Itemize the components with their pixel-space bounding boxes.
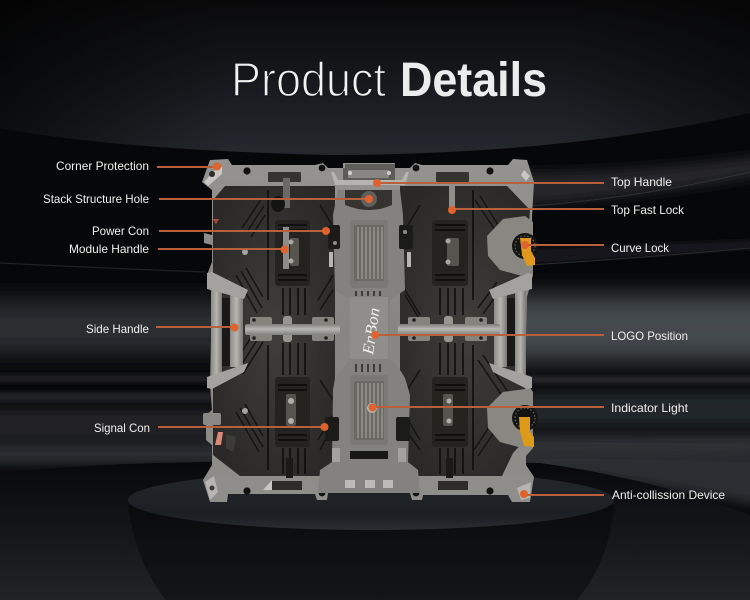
left labels: Signal Con (94, 421, 150, 435)
LED cabinet product photo (202, 159, 538, 502)
cabinet frame (202, 159, 534, 502)
right labels: Curve Lock (611, 241, 670, 255)
pedestal (128, 470, 614, 600)
left labels: Side Handle (86, 322, 149, 336)
title (231, 54, 547, 107)
left labels (43, 159, 150, 435)
title: Details (400, 54, 547, 107)
left side fittings (203, 219, 236, 452)
title: Product (231, 54, 386, 107)
top fast locks (263, 172, 469, 490)
left labels: Module Handle (69, 242, 149, 256)
callout lines (156, 166, 604, 496)
curve locks (487, 216, 538, 448)
left labels: Power Con (92, 224, 149, 238)
mounting holes (243, 165, 494, 496)
module handles, left and right (242, 190, 473, 474)
right labels: Anti-collission Device (612, 488, 725, 502)
right labels (611, 175, 725, 502)
logo: EnBon (360, 307, 384, 357)
side handles (207, 272, 532, 389)
left labels: Stack Structure Hole (43, 192, 149, 206)
right labels: Top Handle (611, 175, 672, 189)
connectors (325, 225, 413, 441)
left back panel (213, 186, 335, 476)
right labels: LOGO Position (611, 329, 688, 343)
right labels: Top Fast Lock (611, 203, 685, 217)
right labels: Indicator Light (611, 401, 689, 415)
right back panel (400, 186, 530, 476)
diagonal ribs (234, 196, 510, 456)
central spine (318, 164, 420, 493)
callout dots (213, 162, 529, 498)
corner protection pieces (204, 167, 531, 500)
left labels: Corner Protection (56, 159, 149, 173)
